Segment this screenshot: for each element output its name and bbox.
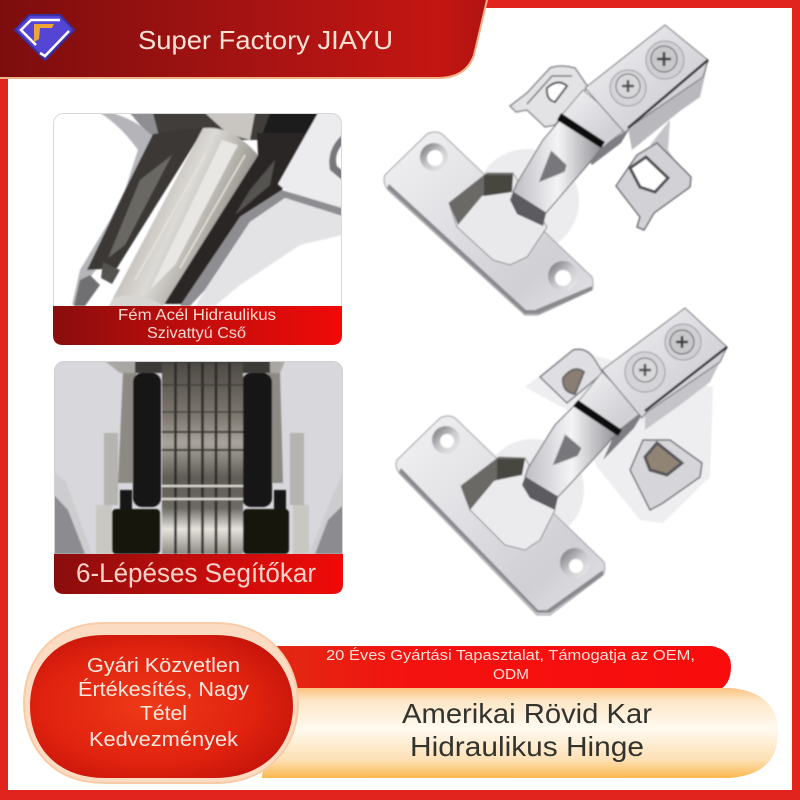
red tagline bar: ODM xyxy=(493,666,529,683)
right ear xyxy=(630,440,702,510)
upper box xyxy=(645,348,727,430)
caption: pump tube: Szivattyú Cső xyxy=(147,325,246,342)
steel cylinder xyxy=(113,128,258,306)
factory discount badge xyxy=(24,623,298,783)
black rollers xyxy=(112,509,160,554)
upper box xyxy=(628,62,708,150)
product name bar: Amerikai Rövid Kar xyxy=(402,698,652,729)
dark pockets xyxy=(87,127,205,270)
gear stack xyxy=(162,363,243,554)
chrome right plate xyxy=(278,113,342,212)
caption: booster arm: 6-Lépéses Segítőkar xyxy=(76,558,316,588)
right ear xyxy=(650,120,675,160)
strap xyxy=(577,372,642,433)
red tagline bar xyxy=(270,646,731,688)
factory discount badge: Értékesítés, Nagy xyxy=(78,678,250,701)
dark arms xyxy=(133,373,161,507)
speckled side strips xyxy=(118,373,136,483)
top dark region xyxy=(152,114,271,142)
panel: six-step booster arm xyxy=(54,361,343,594)
strap xyxy=(560,90,628,147)
icon: diamond logo xyxy=(15,15,74,60)
rear plate shadow xyxy=(525,350,713,523)
small pin xyxy=(101,262,120,284)
factory discount badge: Gyári Közvetlen xyxy=(87,654,240,677)
chrome left rail xyxy=(72,113,158,305)
factory discount badge: Kedvezmények xyxy=(89,728,239,751)
product name bar: Hidraulikus Hinge xyxy=(410,731,644,762)
illustration: upper hinge xyxy=(384,25,708,315)
product name bar xyxy=(262,688,778,778)
caption: booster arm xyxy=(54,554,343,594)
caption: pump tube xyxy=(53,306,342,345)
header title: Super Factory JIAYU xyxy=(138,25,393,55)
screws xyxy=(625,352,665,392)
factory discount badge: Tétel xyxy=(140,702,187,725)
left and right chrome xyxy=(54,472,92,554)
illustration: lower hinge xyxy=(396,308,727,615)
left ear xyxy=(510,66,588,127)
arm xyxy=(525,405,618,497)
left ear xyxy=(540,349,603,403)
red tagline bar: 20 Éves Gyártási Tapasztalat, Támogatja az OEM, xyxy=(326,647,695,664)
header banner xyxy=(0,0,487,79)
panel: hydraulic pump tube xyxy=(53,113,342,345)
screws xyxy=(610,70,646,106)
caption: pump tube: Fém Acél Hidraulikus xyxy=(118,307,276,324)
arm xyxy=(513,120,603,213)
